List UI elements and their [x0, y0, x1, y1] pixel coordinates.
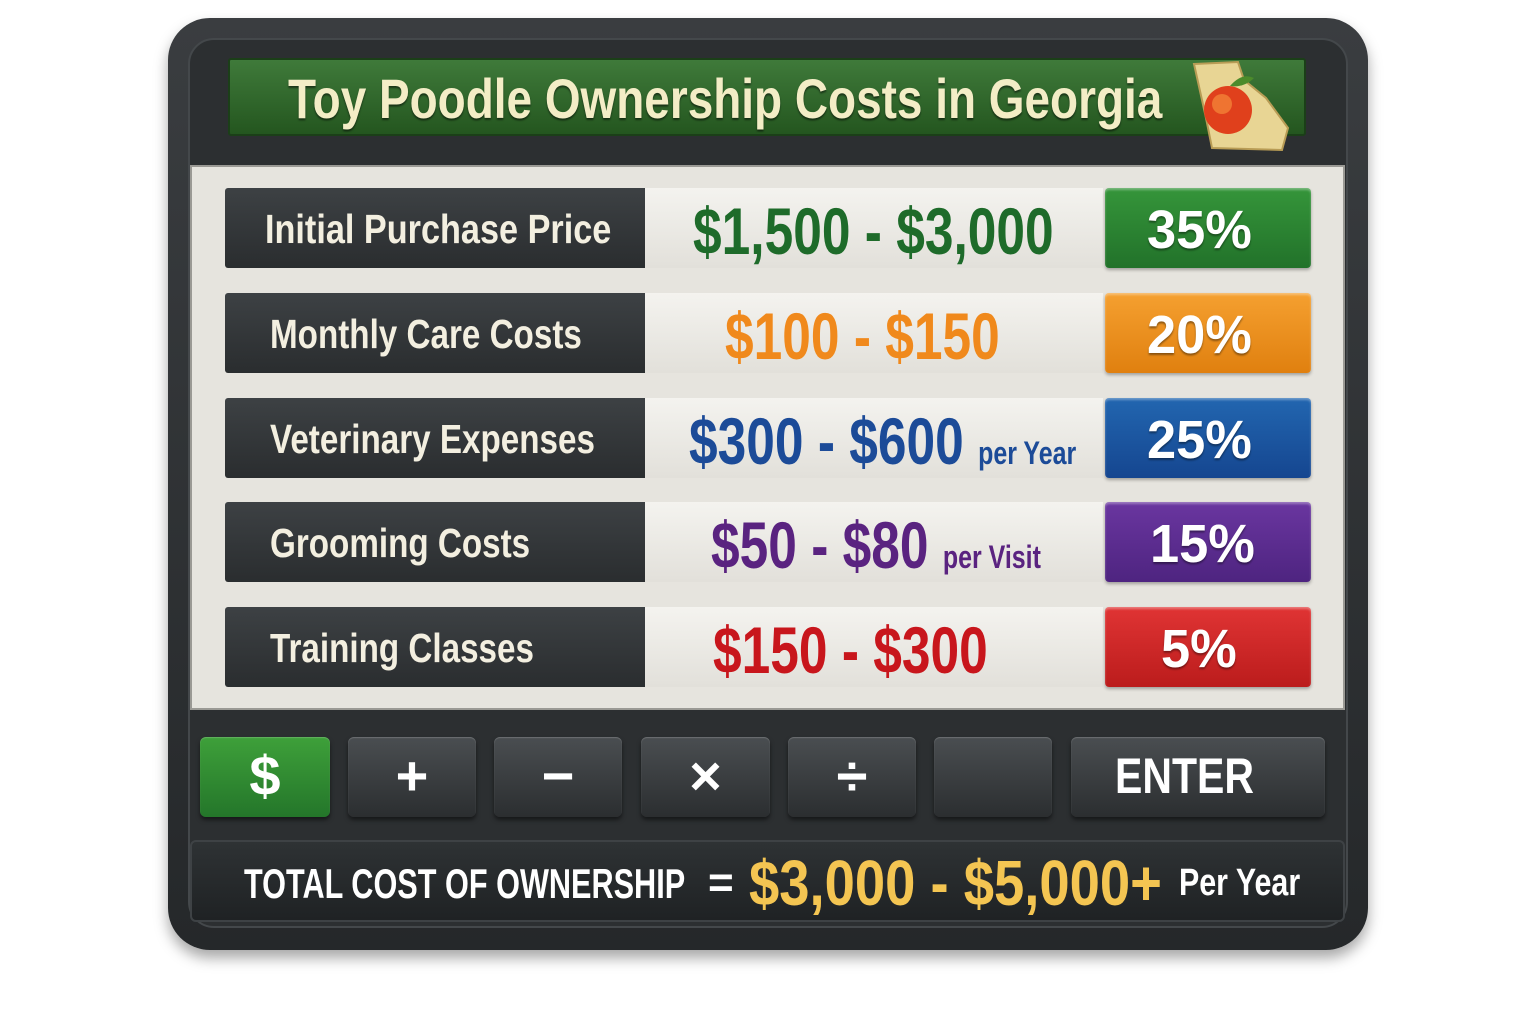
total value: $3,000 - $5,000+ — [749, 847, 1162, 919]
row: training classes: $150 - $300 — [713, 613, 988, 687]
row: training classes: Training Classes — [270, 625, 534, 671]
button: dollar — [200, 737, 330, 817]
row: grooming costs — [225, 502, 1313, 586]
button: dollar: $ — [249, 744, 281, 807]
total bar — [190, 840, 1345, 922]
total label: TOTAL COST OF OWNERSHIP — [244, 860, 685, 907]
row: monthly care costs: 20% — [1147, 305, 1252, 365]
row: initial purchase price: 35% — [1147, 200, 1252, 260]
row: initial purchase price: $1,500 - $3,000 — [693, 194, 1054, 268]
row: monthly care costs: Monthly Care Costs — [270, 311, 582, 357]
row: veterinary expenses: Veterinary Expenses — [270, 416, 595, 462]
button: minus: − — [542, 744, 574, 807]
per year: Per Year — [1179, 862, 1300, 904]
row: training classes: 5% — [1161, 619, 1237, 679]
row: monthly care costs — [225, 293, 1313, 377]
button: times — [641, 737, 770, 817]
row: initial purchase price: Initial Purchase Price — [265, 206, 611, 252]
row: initial purchase price — [225, 188, 1313, 272]
button: divide — [788, 737, 916, 817]
row: veterinary expenses: $300 - $600 per Year — [689, 404, 1076, 478]
button: blank — [934, 737, 1052, 817]
button: plus — [348, 737, 476, 817]
button: minus — [494, 737, 622, 817]
button: times: × — [689, 744, 722, 807]
title bar — [228, 58, 1306, 136]
row: veterinary expenses: 25% — [1147, 410, 1252, 470]
row: monthly care costs: $100 - $150 — [725, 299, 1000, 373]
display panel — [190, 165, 1345, 710]
row: veterinary expenses — [225, 398, 1313, 482]
button: enter: ENTER — [1115, 748, 1254, 804]
icon: georgia state with peach — [1192, 61, 1290, 151]
title: Toy Poodle Ownership Costs in Georgia — [288, 67, 1162, 130]
row: grooming costs: 15% — [1150, 514, 1255, 574]
equals sign: = — [708, 858, 734, 907]
button: divide: ÷ — [837, 744, 867, 807]
button: enter — [1071, 737, 1325, 817]
row: grooming costs: $50 - $80 per Visit — [711, 508, 1041, 582]
button: plus: + — [396, 744, 428, 807]
row: training classes — [225, 607, 1313, 691]
calculator body — [168, 18, 1368, 950]
row: grooming costs: Grooming Costs — [270, 520, 530, 566]
